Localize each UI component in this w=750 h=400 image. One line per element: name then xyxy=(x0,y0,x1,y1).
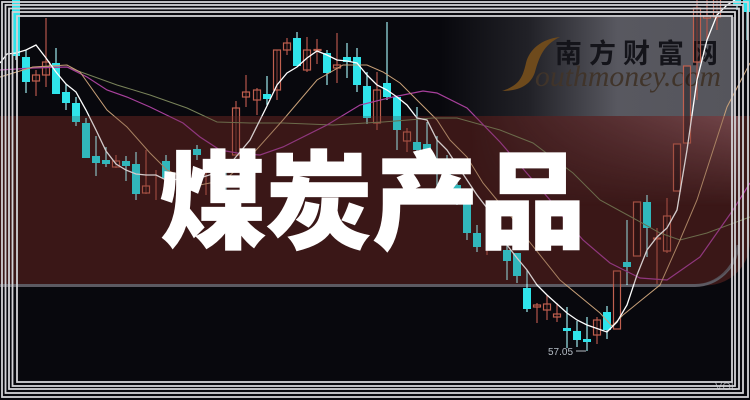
volume label: VOL xyxy=(715,381,737,393)
moving average: olive xyxy=(0,67,750,240)
low price label xyxy=(548,347,586,358)
title: 煤炭产品 xyxy=(160,145,586,263)
panel: band tint over chart xyxy=(0,116,740,284)
panel: dark red band xyxy=(0,116,750,285)
panel: band bottom edge xyxy=(0,245,738,286)
bodies: rising red hollow xyxy=(32,0,720,335)
moving average: tan xyxy=(0,63,750,326)
wicks: rising red xyxy=(36,0,717,344)
panel: band top glow xyxy=(513,116,740,192)
icon: logo swoosh xyxy=(502,37,560,91)
watermark logo xyxy=(502,37,725,93)
moving average: purple xyxy=(0,67,750,280)
low price label: 57.05 xyxy=(548,347,573,358)
logo latin name: outhmoney.com xyxy=(535,60,721,93)
panel: grey glass behind logo xyxy=(440,17,735,116)
logo chinese name: 南方财富网 xyxy=(555,38,725,69)
